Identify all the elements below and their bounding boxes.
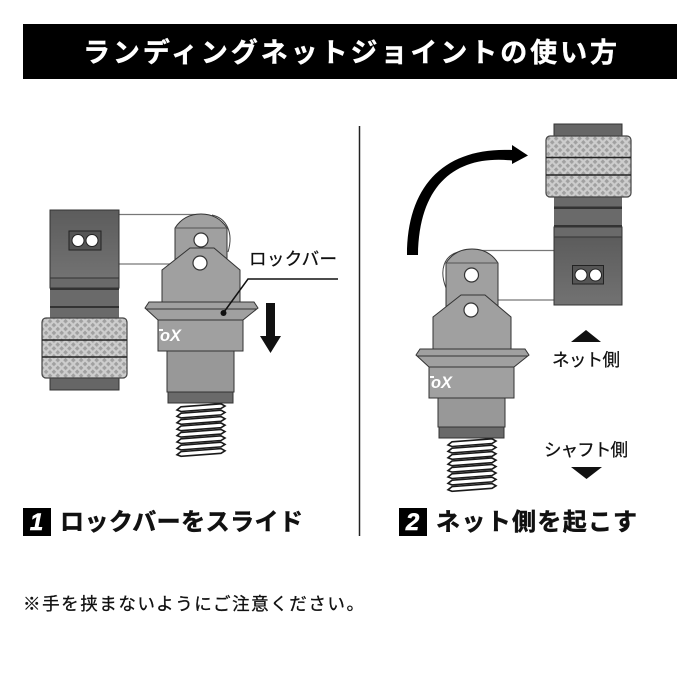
step 2 caption: ネット側を起こす (436, 509, 637, 536)
connecting lines (119, 214, 230, 264)
center divider (358, 126, 360, 536)
step 2 caption: 2 (405, 509, 420, 536)
arrow: raise net side (407, 145, 528, 255)
footnote: ※手を挟まないようにご注意ください。 (23, 594, 364, 614)
joint body (416, 295, 529, 398)
joint lower stem and thread (438, 398, 505, 491)
label: lock bar (220, 249, 338, 316)
label: net side (552, 330, 620, 370)
title banner (23, 24, 677, 79)
net-side coupler (42, 210, 127, 390)
arrow: slide down (260, 303, 281, 353)
connecting lines (443, 250, 554, 300)
back plate (446, 249, 498, 340)
net-side coupler, flipped (546, 124, 631, 305)
step 1 caption: ロックバーをスライド (60, 509, 303, 536)
label: shaft side: シャフト側 (544, 440, 628, 460)
back plate (175, 214, 227, 303)
panel: step 1 illustration (42, 210, 258, 456)
label: shaft side (544, 440, 628, 479)
label: lock bar: ロックバー (249, 249, 337, 269)
panel: step 2 illustration (416, 124, 631, 491)
label: net side: ネット側 (552, 350, 620, 370)
joint body (145, 248, 258, 351)
title banner: ランディングネットジョイントの使い方 (83, 37, 617, 68)
joint lower stem and thread (167, 351, 234, 456)
step 1 caption: 1 (30, 509, 43, 536)
